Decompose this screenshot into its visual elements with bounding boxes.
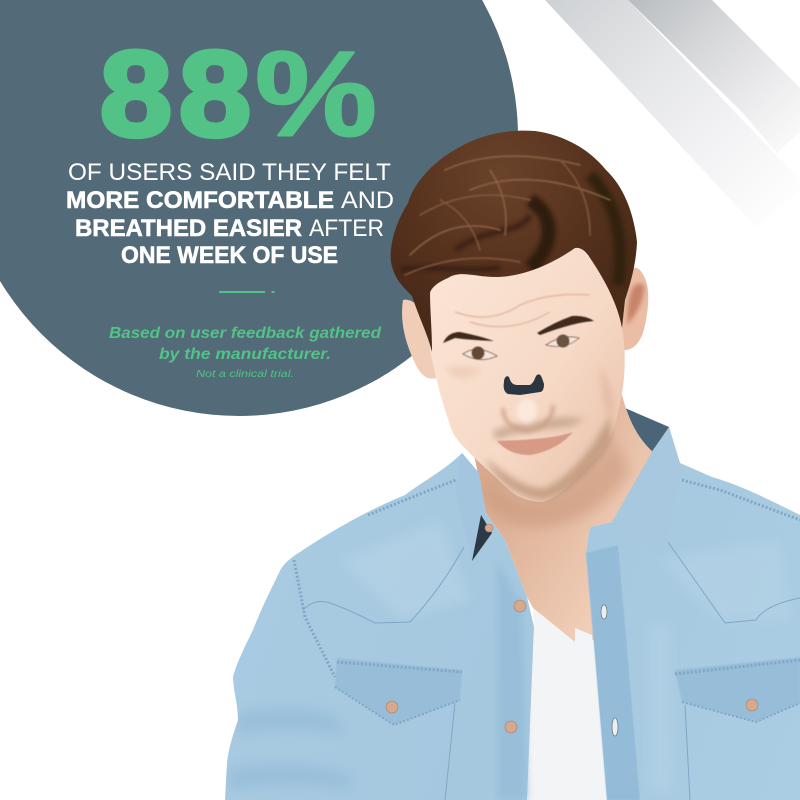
neck shadow under jaw (478, 440, 630, 527)
lips (497, 432, 573, 455)
buttonholes (601, 605, 618, 736)
big statistic: 88%: % (255, 26, 377, 162)
decorative diagonal gradient bands (545, 0, 800, 228)
big statistic: 88% (100, 26, 377, 162)
panel: slate circle (0, 0, 518, 416)
eyebrows (443, 332, 494, 343)
photo: man wearing nasal clip (225, 131, 800, 800)
right placket (586, 545, 640, 800)
face (430, 245, 625, 502)
source note: Not a clinical trial. (196, 368, 294, 380)
nasal clip (504, 374, 544, 395)
source note (109, 325, 382, 380)
right ear (620, 268, 648, 350)
left ear (402, 300, 437, 379)
denim shirt right (586, 427, 800, 800)
headline text block: AFTER (309, 215, 384, 242)
eyes (463, 334, 579, 360)
inner collar (625, 408, 669, 455)
divider (219, 291, 274, 293)
left placket shading (497, 560, 528, 800)
headline text block: AND (341, 187, 394, 214)
buttons (386, 524, 758, 733)
neck (470, 395, 653, 642)
big statistic: 88%: 8 (100, 26, 172, 162)
source note: Based on user feedback gathered (109, 325, 382, 342)
headline text block: MORE COMFORTABLE (66, 187, 334, 214)
hair (391, 131, 637, 352)
headline text block: OF USERS SAID THEY FELT (68, 159, 391, 186)
seams (294, 480, 800, 800)
headline text block: BREATHED EASIER (75, 215, 302, 242)
big statistic: 88%: 8 (179, 26, 251, 162)
denim shirt left (225, 453, 534, 800)
headline text block: ONE WEEK OF USE (121, 242, 338, 269)
nose shading (503, 399, 553, 431)
pocket flaps (335, 658, 462, 725)
source note: by the manufacturer. (159, 346, 331, 363)
headline text block (66, 159, 394, 269)
right collar (612, 427, 682, 557)
forehead wrinkles (455, 294, 590, 327)
hair strands (400, 156, 620, 285)
stubble and facial shading (445, 365, 613, 500)
left collar (456, 453, 486, 560)
shirt shading (230, 529, 708, 788)
t-shirt (527, 608, 607, 800)
